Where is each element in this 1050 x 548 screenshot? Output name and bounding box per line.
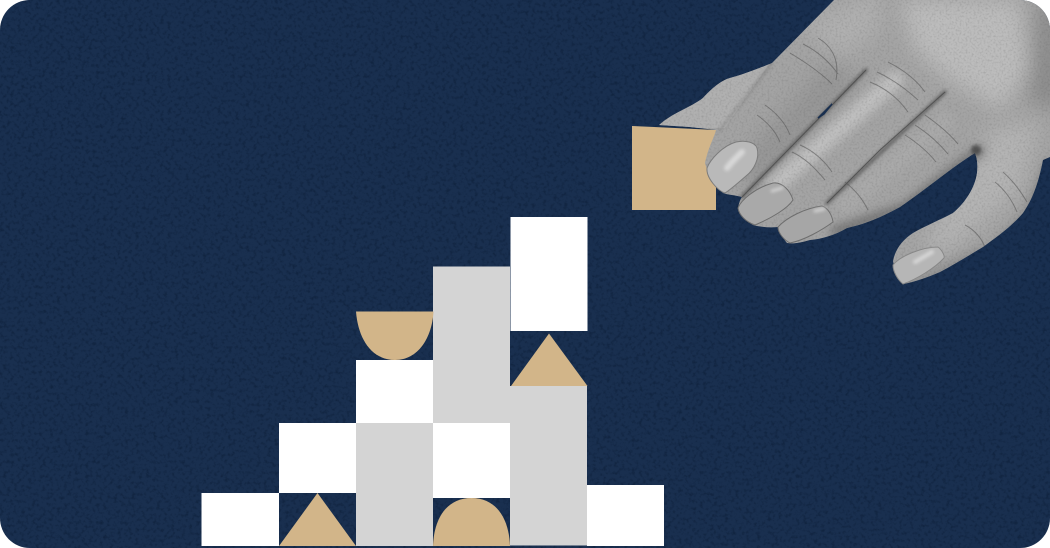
nail: ring <box>778 206 833 243</box>
sharp finger gap lines <box>742 70 945 203</box>
bowl: upper tan <box>356 312 434 360</box>
dome: bottom tan <box>433 498 510 546</box>
nail: thumb <box>893 247 944 284</box>
hand silhouette with soft shading <box>640 0 1050 300</box>
triangle: upper tan <box>511 334 588 386</box>
middle and ring finger highlights <box>775 80 1050 290</box>
tan block held by hand <box>632 126 716 210</box>
skin grain <box>662 0 1050 281</box>
dark hollow beside thumb <box>971 145 981 155</box>
nail: middle <box>738 183 793 225</box>
hand <box>640 0 1050 300</box>
rear finger tone <box>660 64 769 128</box>
back of hand tone <box>730 0 1050 250</box>
nail highlights <box>727 152 932 262</box>
triangle: bottom tan <box>279 493 356 546</box>
knuckle creases <box>757 38 1027 248</box>
sliver of background between fingers <box>818 104 832 118</box>
finger gap shadows <box>720 63 945 203</box>
stacked blocks <box>202 217 664 546</box>
nail: index <box>707 141 758 193</box>
